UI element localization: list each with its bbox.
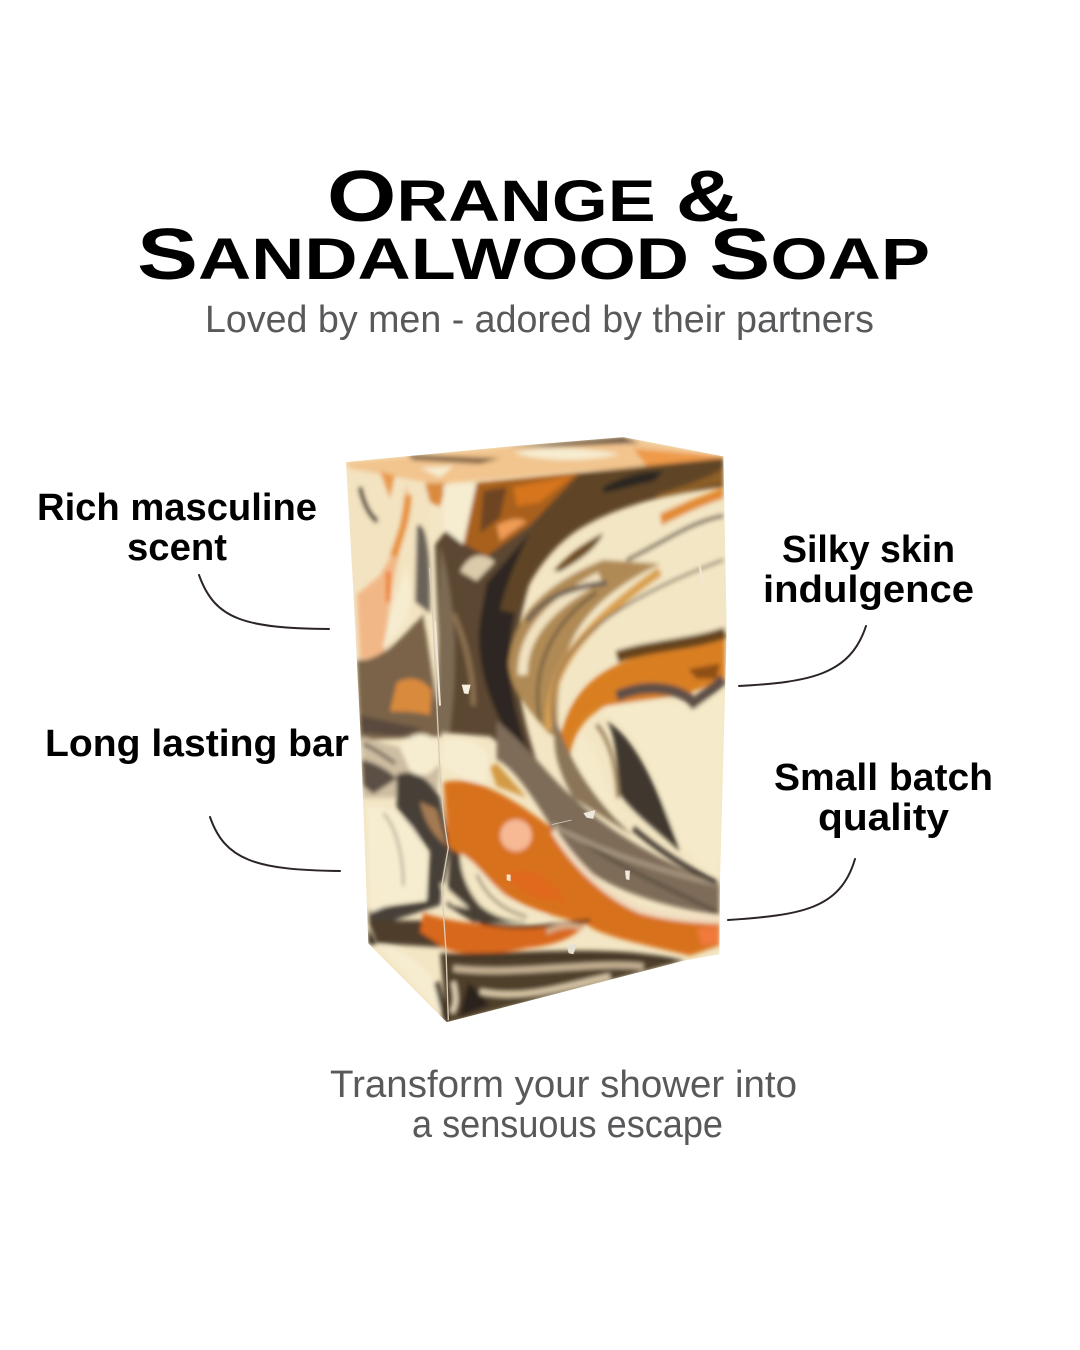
leader line: rich masculine scent — [199, 575, 329, 629]
label: silky skin indulgence: indulgence — [763, 569, 974, 611]
label: silky skin indulgence — [763, 529, 974, 611]
label: small batch quality: Small batch — [774, 757, 993, 799]
swirl — [508, 560, 660, 740]
closing tagline: a sensuous escape — [412, 1104, 723, 1146]
leader line: long lasting bar — [210, 817, 340, 871]
soap bar illustration — [340, 430, 740, 1043]
label: small batch quality — [774, 757, 993, 839]
label: rich masculine scent — [37, 487, 317, 569]
label: rich masculine scent: Rich masculine — [37, 487, 317, 529]
leader line: small batch quality — [728, 859, 855, 920]
title: ORANGE & — [327, 157, 740, 237]
label: rich masculine scent: scent — [127, 527, 227, 569]
label: small batch quality: quality — [818, 797, 949, 839]
title: SANDALWOOD SOAP — [137, 215, 930, 295]
label: long lasting bar: Long lasting bar — [45, 723, 349, 765]
label: silky skin indulgence: Silky skin — [782, 529, 955, 571]
subtitle: Loved by men - adored by their partners — [205, 299, 874, 341]
leader line: silky skin indulgence — [739, 626, 866, 686]
title — [137, 157, 930, 295]
closing tagline: Transform your shower into — [330, 1064, 797, 1106]
closing tagline — [330, 1064, 797, 1146]
